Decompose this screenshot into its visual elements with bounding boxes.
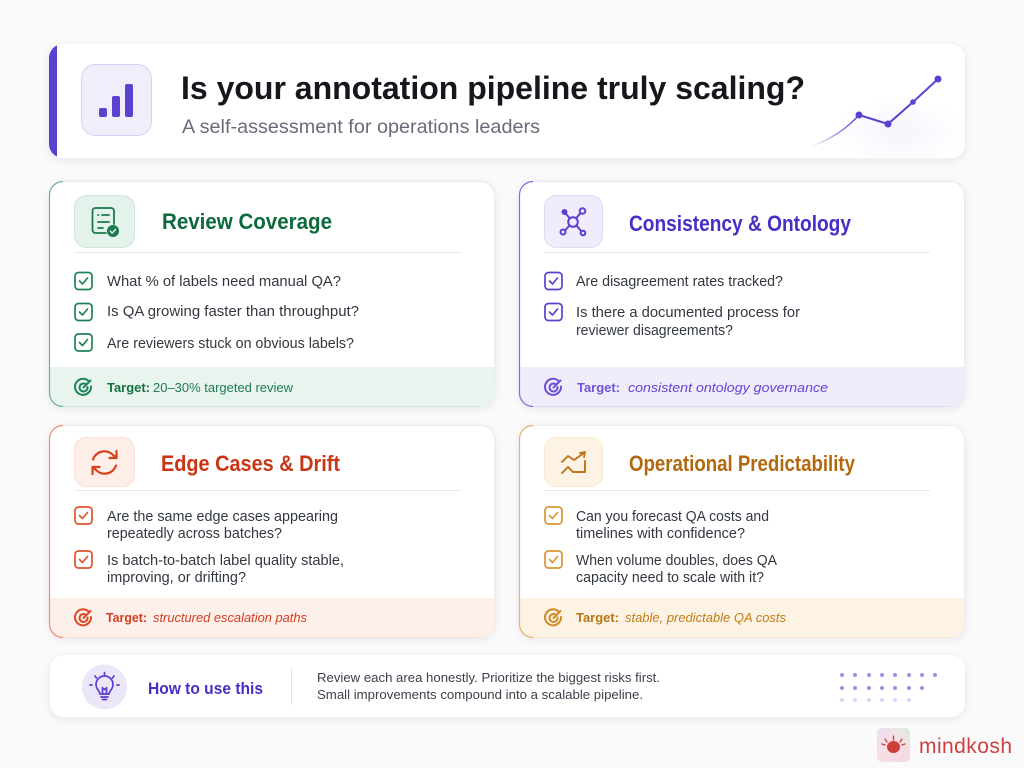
icon: network [544,196,602,248]
checklist: timelines with confidence? [576,526,745,542]
target: consistent ontology governance [628,381,828,395]
target: stable, predictable QA costs [625,611,786,625]
checklist: When volume doubles, does QA [576,553,777,569]
title: Is your annotation pipeline truly scaling? [181,70,805,106]
panel: operational predictability [519,426,965,638]
heading: How to use this [148,679,263,698]
panel: review coverage [49,182,495,407]
heading: Operational Predictability [629,451,856,476]
icon: light bulb [82,664,127,710]
target [75,379,294,395]
target [545,609,786,625]
icon: bar chart [82,64,152,136]
target: Target: [576,611,619,625]
text block: Small improvements compound into a scalable pipeline. [317,688,643,702]
checklist [545,272,800,339]
subtitle: A self-assessment for operations leaders [182,116,540,138]
line chart decoration [814,76,942,146]
checklist: repeatedly across batches? [107,526,282,542]
checklist: Are reviewers stuck on obvious labels? [107,336,354,352]
heading: Edge Cases & Drift [161,451,341,476]
target: Target: [106,611,147,625]
checklist: Are disagreement rates tracked? [576,274,783,290]
checklist: Are the same edge cases appearing [107,509,338,525]
checklist [75,507,344,586]
checklist: reviewer disagreements? [576,323,733,339]
target: structured escalation paths [153,611,307,625]
checklist: Is there a documented process for [576,305,800,321]
checklist [75,272,359,352]
logo: mindkosh [877,728,1012,762]
panel: consistency and ontology [519,182,965,407]
target: 20–30% targeted review [153,381,294,395]
icon: document check [74,196,134,248]
text block: Review each area honestly. Prioritize the biggest risks first. [317,671,660,685]
checklist: What % of labels need manual QA? [107,274,341,290]
heading: Consistency & Ontology [629,211,852,236]
text block [317,671,660,702]
target [75,609,307,625]
checklist [545,507,777,586]
panel: edge cases and drift [49,426,495,638]
checklist: Is QA growing faster than throughput? [107,304,359,320]
target: Target: [577,381,620,395]
checklist: capacity need to scale with it? [576,570,764,586]
checklist: improving, or drifting? [107,570,246,586]
panel: how to use this [50,655,965,717]
icon: refresh [74,438,134,486]
checklist: Can you forecast QA costs and [576,509,769,525]
logo: mindkosh: mindkosh [919,735,1012,758]
target: Target: [107,381,150,395]
heading: Review Coverage [162,209,332,234]
target [545,379,828,395]
icon: trend [544,438,602,486]
checklist: Is batch-to-batch label quality stable, [107,553,344,569]
panel: header [49,44,965,166]
